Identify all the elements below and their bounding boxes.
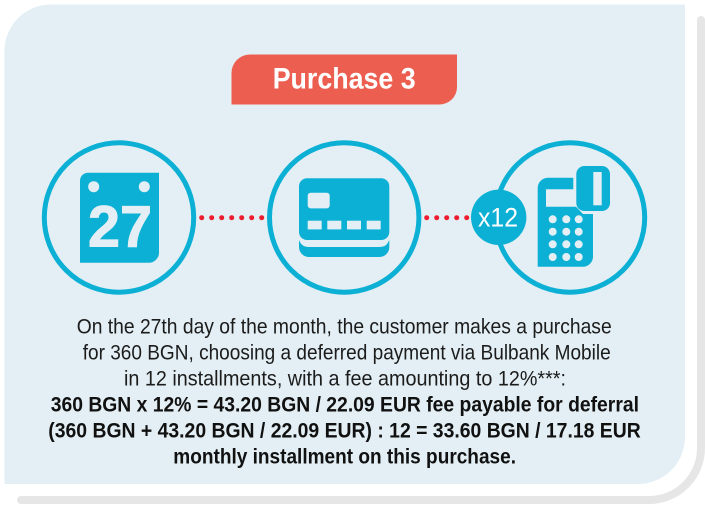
heading: Purchase 3: Purchase 3 [273,62,416,95]
text block: fee calculation: monthly installment on this purchase. [173,445,516,468]
badge: x12 installments: x12 [478,203,518,233]
text block: fee calculation: 360 BGN x 12% = 43.20 BGN / 22.09 EUR fee payable for deferral [51,393,639,416]
heading: Purchase 3 [232,54,457,104]
text block: purchase description: for 360 BGN, choosing a deferred payment via Bulbank Mobile [83,341,611,364]
text block: purchase description: in 12 installments, with a fee amounting to 12%***: [124,367,566,390]
badge: x12 installments [471,190,526,245]
connector: dotted line from card to installments [424,215,469,220]
icon: calendar showing day 27 [44,143,194,292]
text block: purchase description [77,315,612,390]
text block: purchase description: On the 27th day of the month, the customer makes a purchase [77,315,612,338]
icon: bank card [270,143,419,292]
text block: fee calculation: (360 BGN + 43.20 BGN / 22.09 EUR) : 12 = 33.60 BGN / 17.18 EUR [48,419,641,442]
text block: fee calculation [48,393,641,468]
icon: mobile phone with card [495,143,645,292]
icon: calendar showing day 27: 27 [88,195,152,260]
connector: dotted line from calendar to card [199,215,264,220]
